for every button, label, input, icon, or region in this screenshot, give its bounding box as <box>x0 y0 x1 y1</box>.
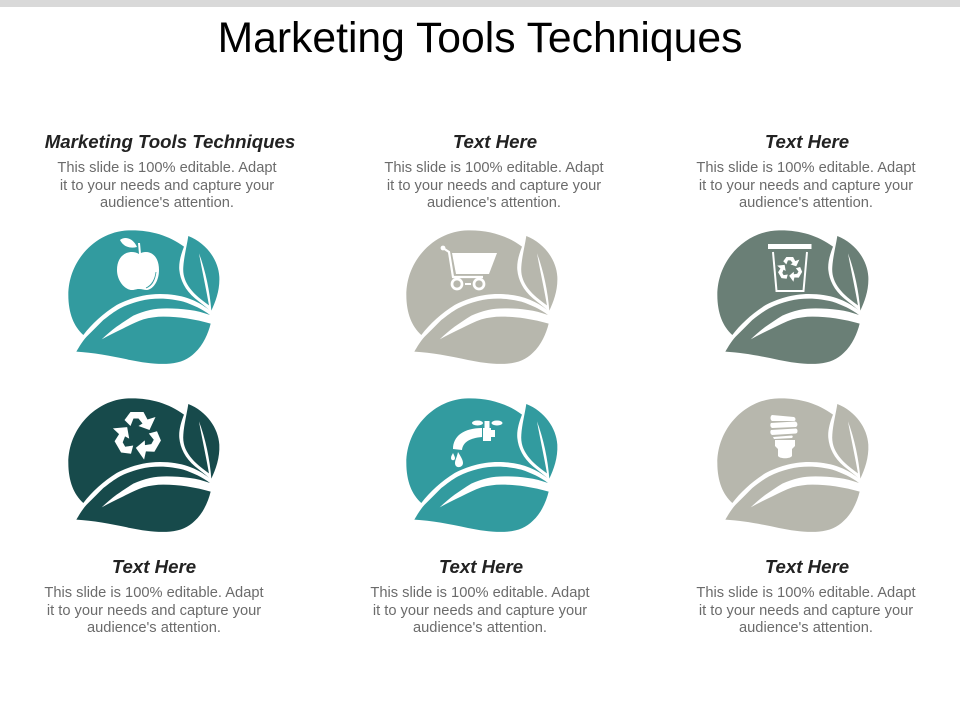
block: text here top right <box>696 131 916 211</box>
block: text here bottom left <box>44 556 264 636</box>
emblem: light bulb <box>717 398 868 532</box>
block: text here bottom left: This slide is 100% editable. Adapt <box>44 585 264 601</box>
block: text here bottom middle: audience's attention. <box>413 620 547 636</box>
icon: recycling bin <box>768 244 812 291</box>
block: text here bottom left: audience's attention. <box>87 620 221 636</box>
block: text here bottom right: audience's attention. <box>739 620 873 636</box>
emblem: recycle symbol <box>68 398 219 532</box>
icon: apple <box>117 238 159 290</box>
block: text here top middle: Text Here <box>453 131 537 152</box>
block: text here bottom left: Text Here <box>112 556 196 577</box>
icon: recycle symbol <box>109 412 164 462</box>
block: text here bottom right: Text Here <box>765 556 849 577</box>
block: text here bottom middle: This slide is 100% editable. Adapt <box>370 585 590 601</box>
block: text here bottom middle <box>370 556 590 636</box>
block: text here top right: audience's attention. <box>739 195 873 211</box>
block: marketing tools techniques: This slide is 100% editable. Adapt <box>57 160 277 176</box>
block: text here top right: This slide is 100% editable. Adapt <box>696 160 916 176</box>
block: text here top right: Text Here <box>765 131 849 152</box>
block: marketing tools techniques <box>45 131 295 211</box>
emblem: shopping cart <box>406 230 557 364</box>
block: text here top middle: it to your needs and capture your <box>387 178 601 194</box>
block: text here bottom left: it to your needs and capture your <box>47 602 261 618</box>
block: text here bottom middle: it to your needs and capture your <box>373 602 587 618</box>
icon: shopping cart <box>441 246 497 289</box>
block: text here top middle: audience's attention. <box>427 195 561 211</box>
icon: water tap <box>451 420 502 467</box>
block: marketing tools techniques: it to your needs and capture your <box>60 178 274 194</box>
block: text here bottom middle: Text Here <box>439 556 523 577</box>
emblem: apple <box>68 230 219 364</box>
block: text here bottom right <box>696 556 916 636</box>
block: text here bottom right: This slide is 100% editable. Adapt <box>696 585 916 601</box>
top bar <box>0 0 960 7</box>
block: text here top middle: This slide is 100% editable. Adapt <box>384 160 604 176</box>
title: Marketing Tools Techniques <box>218 14 742 62</box>
block: marketing tools techniques: Marketing Tools Techniques <box>45 131 295 152</box>
block: text here top right: it to your needs and capture your <box>699 178 913 194</box>
block: text here bottom right: it to your needs and capture your <box>699 602 913 618</box>
icon: light bulb <box>770 415 798 458</box>
emblem: recycling bin <box>717 230 868 364</box>
emblem: water tap <box>406 398 557 532</box>
block: marketing tools techniques: audience's attention. <box>100 195 234 211</box>
block: text here top middle <box>384 131 604 211</box>
